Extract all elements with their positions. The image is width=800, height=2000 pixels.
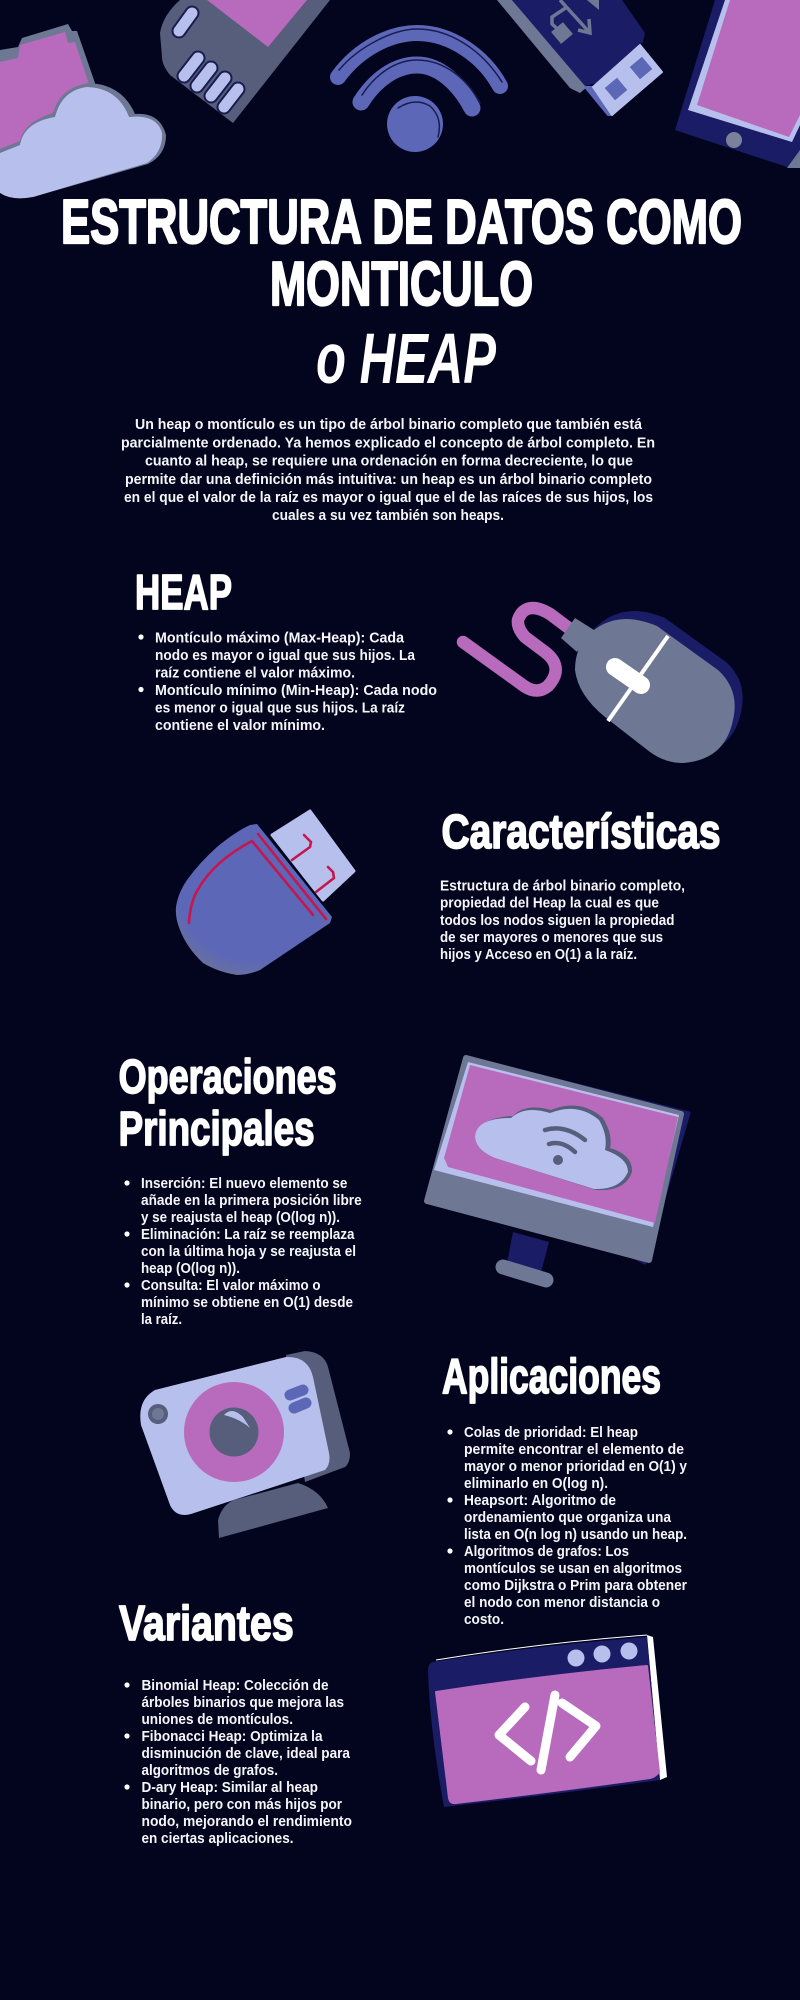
intro paragraph: cuanto al heap, se requiere una ordenación en forma decreciente, lo que: [145, 454, 633, 470]
list: variantes: [124, 1678, 352, 1847]
list: operaciones: [124, 1176, 362, 1328]
paragraph: características: hijos y Acceso en O(1) a la raíz.: [440, 947, 637, 963]
heading: Operaciones Principales: [119, 1051, 337, 1156]
heading: Operaciones Principales: Principales: [119, 1103, 315, 1156]
intro paragraph: permite dar una definición más intuitiva: un heap es un árbol binario completo: [125, 472, 652, 488]
list: heap types: nodo es mayor o igual que sus hijos. La: [155, 648, 416, 664]
list: aplicaciones: Algoritmos de grafos: Los: [464, 1544, 629, 1560]
list: operaciones: con la última hoja y se reajusta el: [141, 1244, 356, 1260]
icon: usb drive: [497, 0, 662, 115]
icon: tablet phone: [675, 0, 800, 168]
list: aplicaciones: costo.: [464, 1612, 504, 1628]
intro paragraph: parcialmente ordenado. Ya hemos explicado el concepto de árbol completo. En: [121, 436, 655, 452]
list: variantes: D-ary Heap: Similar al heap: [142, 1780, 318, 1796]
list: variantes: árboles binarios que mejora las: [142, 1695, 344, 1711]
list: variantes: en ciertas aplicaciones.: [142, 1831, 294, 1847]
list: operaciones: mínimo se obtiene en O(1) desde: [141, 1295, 353, 1311]
list: operaciones: heap (O(log n)).: [141, 1261, 240, 1277]
paragraph: características: de ser mayores o menores que sus: [440, 930, 663, 946]
title: MONTICULO: [270, 250, 533, 319]
list: operaciones: y se reajusta el heap (O(log n)).: [141, 1210, 340, 1226]
title: [61, 188, 742, 319]
paragraph: características: todos los nodos siguen la propiedad: [440, 913, 674, 929]
paragraph: características: propiedad del Heap la cual es que: [440, 896, 659, 912]
list: aplicaciones: como Dijkstra o Prim para obtener: [464, 1578, 687, 1594]
icon: wifi: [338, 29, 502, 152]
list: operaciones: Inserción: El nuevo elemento se: [141, 1176, 347, 1192]
list: operaciones: añade en la primera posición libre: [141, 1193, 362, 1209]
icon: code window: [428, 1635, 667, 1807]
list: aplicaciones: montículos se usan en algoritmos: [464, 1561, 682, 1577]
list: variantes: binario, pero con más hijos por: [142, 1797, 342, 1813]
list: variantes: Binomial Heap: Colección de: [142, 1678, 328, 1694]
list: aplicaciones: ordenamiento que organiza una: [464, 1510, 672, 1526]
intro paragraph: [121, 417, 655, 524]
icon: usb cap: [176, 811, 354, 975]
list: operaciones: la raíz.: [141, 1312, 182, 1328]
heading: HEAP: HEAP: [135, 566, 232, 620]
list: operaciones: Eliminación: La raíz se reemplaza: [141, 1227, 355, 1243]
list: aplicaciones: Heapsort: Algoritmo de: [464, 1493, 616, 1509]
list: heap types: contiene el valor mínimo.: [155, 718, 325, 734]
paragraph: características: [440, 879, 685, 963]
icon: webcam: [140, 1351, 350, 1538]
list: variantes: algoritmos de grafos.: [142, 1763, 278, 1779]
paragraph: características: Estructura de árbol binario completo,: [440, 879, 685, 895]
subtitle: o HEAP: [316, 320, 496, 399]
list: aplicaciones: eliminarlo en O(log n).: [464, 1476, 608, 1492]
list: aplicaciones: mayor o menor prioridad en O(1) y: [464, 1459, 687, 1475]
list: heap types: Montículo máximo (Max-Heap): Cada: [155, 630, 405, 646]
list: variantes: nodo, mejorando el rendimiento: [142, 1814, 352, 1830]
heading: Aplicaciones: Aplicaciones: [442, 1350, 661, 1404]
heading: Características: Características: [442, 806, 720, 859]
icon: computer mouse: [463, 608, 743, 763]
list: aplicaciones: Colas de prioridad: El heap: [464, 1425, 638, 1441]
list: aplicaciones: el nodo con menor distancia o: [464, 1595, 660, 1611]
list: heap types: raíz contiene el valor máximo.: [155, 665, 355, 681]
intro paragraph: en el que el valor de la raíz es mayor o igual que el de las raíces de sus hijos, los: [124, 490, 653, 506]
intro paragraph: cuales a su vez también son heaps.: [272, 508, 504, 524]
list: variantes: Fibonacci Heap: Optimiza la: [142, 1729, 323, 1745]
list: variantes: disminución de clave, ideal para: [142, 1746, 351, 1762]
list: aplicaciones: [447, 1425, 687, 1628]
icon: monitor with cloud: [427, 1058, 689, 1280]
list: variantes: uniones de montículos.: [142, 1712, 293, 1728]
icon: memory card: [160, 0, 330, 123]
icon: cloud: [0, 83, 166, 198]
list: heap types: Montículo mínimo (Min-Heap): Cada nodo: [155, 683, 437, 699]
icon: folder: [0, 24, 95, 160]
heading: Variantes: Variantes: [119, 1597, 294, 1651]
list: aplicaciones: permite encontrar el elemento de: [464, 1442, 684, 1458]
heading: Operaciones Principales: Operaciones: [119, 1051, 337, 1104]
intro paragraph: Un heap o montículo es un tipo de árbol binario completo que también está: [135, 417, 643, 433]
list: heap types: [138, 630, 437, 734]
list: aplicaciones: lista en O(n log n) usando un heap.: [464, 1527, 687, 1543]
list: operaciones: Consulta: El valor máximo o: [141, 1278, 321, 1294]
list: heap types: es menor o igual que sus hijos. La raíz: [155, 700, 405, 716]
